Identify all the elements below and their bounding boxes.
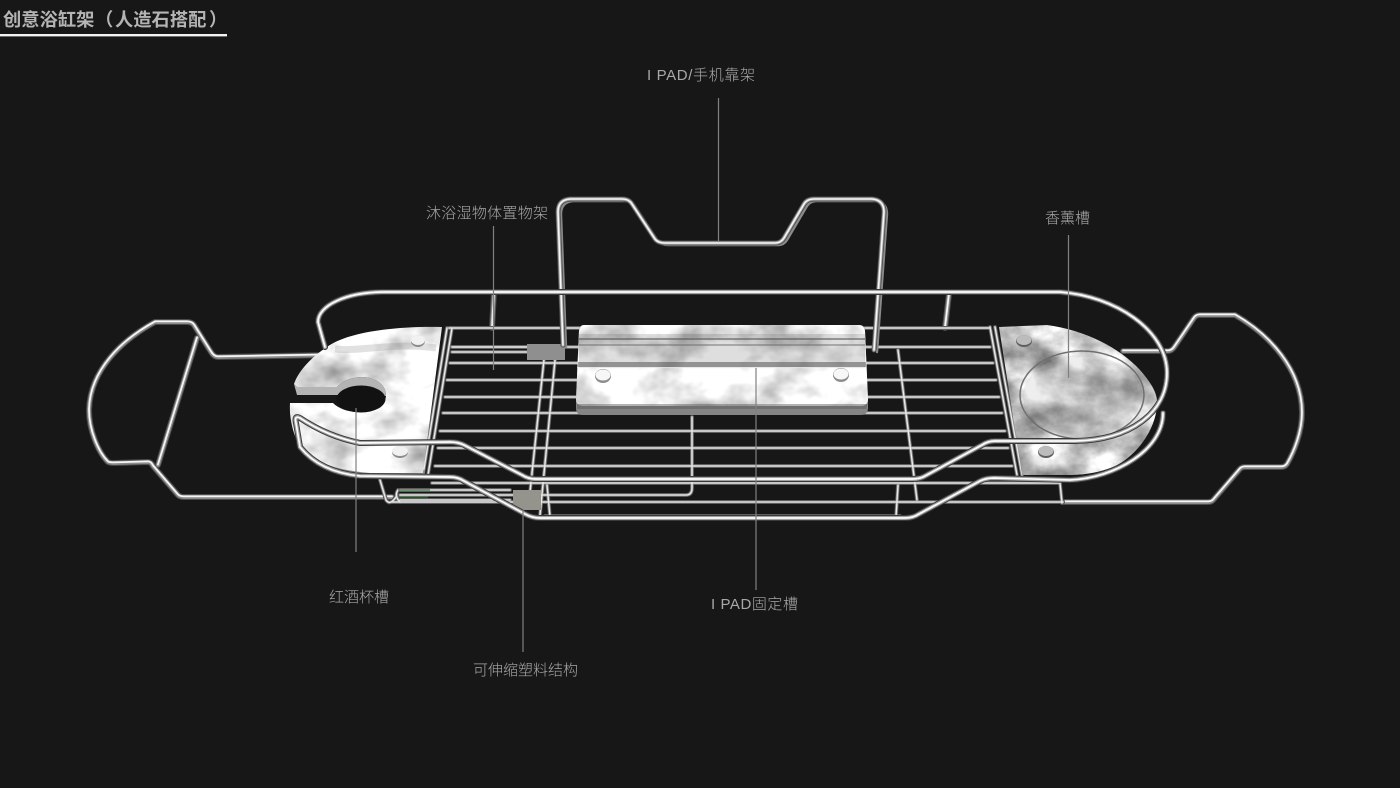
marble tablet slot plate — [576, 325, 868, 415]
title: 创意浴缸架 — [3, 9, 94, 30]
title: ） — [209, 9, 227, 30]
marble wine glass plate — [290, 327, 442, 476]
callout: aroma tray: 香薰槽 — [1045, 210, 1090, 227]
callout: tablet and phone rest: I PAD/手机靠架 — [647, 67, 755, 84]
title: 人造石搭配 — [115, 9, 206, 30]
back rails and extending handles — [89, 291, 1302, 502]
telescopic plastic blocks — [398, 344, 565, 510]
callout: tablet slot: I PAD固定槽 — [711, 596, 798, 613]
bath caddy product illustration — [89, 199, 1302, 518]
tablet and phone rest frame — [558, 199, 887, 352]
title underline — [0, 34, 227, 36]
top and front rail — [296, 292, 1167, 518]
title: （ — [95, 9, 113, 30]
callout: wet item shelf: 沐浴湿物体置物架 — [426, 205, 548, 222]
wire grid shelf — [380, 327, 1063, 517]
callout: wine glass slot: 红酒杯槽 — [329, 589, 389, 606]
marble aroma plate — [999, 325, 1157, 475]
callout: telescopic plastic structure: 可伸缩塑料结构 — [473, 662, 578, 679]
